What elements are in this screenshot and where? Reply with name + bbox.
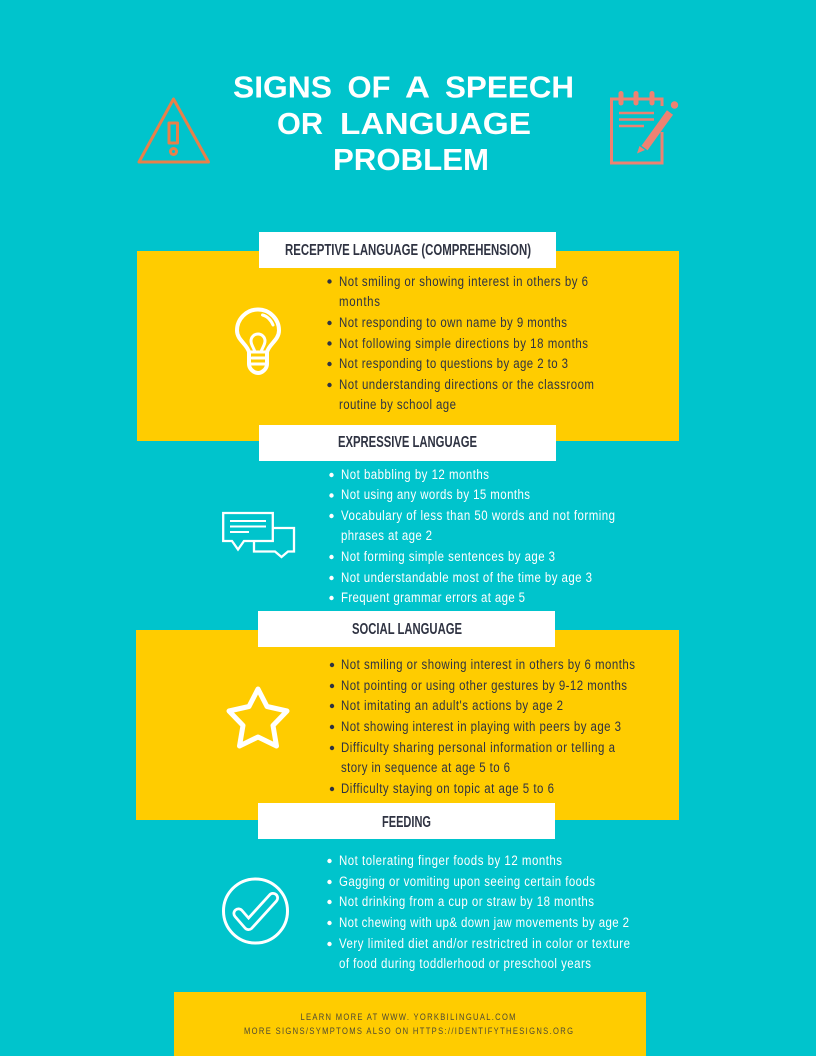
footer text: MORE SIGNS/SYMPTOMS ALSO ON HTTPS://IDENTIFYTHESIGNS.ORG — [244, 1025, 573, 1036]
heading: feeding — [258, 803, 555, 839]
icon: star — [229, 689, 287, 746]
list: expressive language: Frequent grammar errors at age 5 — [341, 590, 525, 605]
list: receptive language: Not responding to questions by age 2 to 3 — [339, 356, 568, 371]
icon: light bulb — [237, 310, 279, 373]
footer panel — [174, 992, 646, 1056]
heading: expressive language: EXPRESSIVE LANGUAGE — [338, 434, 477, 451]
heading: expressive language — [259, 425, 556, 461]
list: receptive language: routine by school age — [339, 397, 456, 412]
footer text — [244, 1011, 573, 1036]
heading: receptive language — [259, 232, 556, 268]
panel: expressive language — [223, 425, 615, 605]
panel: receptive language — [137, 232, 679, 441]
title: A — [405, 70, 430, 104]
icon: speech bubbles — [223, 513, 294, 557]
list: feeding: Not chewing with up& down jaw movements by age 2 — [339, 915, 629, 930]
title: SIGNS — [233, 70, 332, 104]
list: feeding: of food during toddlerhood or preschool years — [339, 956, 591, 971]
heading: receptive language: RECEPTIVE LANGUAGE (COMPREHENSION) — [285, 242, 531, 259]
panel: social language — [136, 611, 679, 820]
list: expressive language: Not forming simple sentences by age 3 — [341, 549, 555, 564]
list: social language: Not showing interest in playing with peers by age 3 — [341, 719, 621, 734]
list: social language: Not imitating an adult's actions by age 2 — [341, 698, 563, 713]
title: SPEECH — [445, 70, 574, 104]
list: expressive language: phrases at age 2 — [341, 528, 432, 543]
icon: notepad with pencil — [612, 94, 678, 163]
list: feeding: Very limited diet and/or restrictred in color or texture — [339, 936, 630, 951]
list: expressive language: Not using any words by 15 months — [341, 487, 530, 502]
title: OF — [348, 70, 390, 104]
heading: social language — [258, 611, 555, 647]
list: social language: story in sequence at age 5 to 6 — [341, 760, 510, 775]
list: feeding: Gagging or vomiting upon seeing certain foods — [339, 874, 595, 889]
list: receptive language: Not understanding directions or the classroom — [339, 377, 594, 392]
list: expressive language: Not understandable most of the time by age 3 — [341, 570, 592, 585]
icon: warning triangle — [139, 99, 208, 162]
title — [233, 70, 574, 177]
heading: feeding: FEEDING — [382, 814, 431, 831]
list: expressive language: Not babbling by 12 months — [341, 467, 489, 482]
list: expressive language — [329, 467, 615, 605]
title: OR — [277, 106, 323, 141]
panel: feeding — [224, 803, 630, 971]
list: expressive language: Vocabulary of less than 50 words and not forming — [341, 508, 615, 523]
list: feeding — [327, 853, 630, 971]
heading: social language: SOCIAL LANGUAGE — [352, 621, 462, 638]
title: LANGUAGE — [340, 106, 531, 141]
list: social language — [330, 657, 635, 796]
list: receptive language: Not following simple directions by 18 months — [339, 336, 588, 351]
icon: check mark in circle — [224, 879, 288, 943]
list: feeding: Not drinking from a cup or straw by 18 months — [339, 894, 594, 909]
title: PROBLEM — [333, 142, 489, 177]
footer text: LEARN MORE AT WWW. YORKBILINGUAL.COM — [300, 1011, 516, 1022]
list: social language: Not pointing or using other gestures by 9-12 months — [341, 678, 627, 693]
list: social language: Difficulty sharing personal information or telling a — [341, 740, 615, 755]
list: receptive language — [327, 274, 594, 412]
list: feeding: Not tolerating finger foods by 12 months — [339, 853, 562, 868]
list: social language: Not smiling or showing interest in others by 6 months — [341, 657, 635, 672]
list: receptive language: Not smiling or showing interest in others by 6 — [339, 274, 588, 289]
list: social language: Difficulty staying on topic at age 5 to 6 — [341, 781, 554, 796]
list: receptive language: Not responding to own name by 9 months — [339, 315, 567, 330]
list: receptive language: months — [339, 294, 380, 309]
